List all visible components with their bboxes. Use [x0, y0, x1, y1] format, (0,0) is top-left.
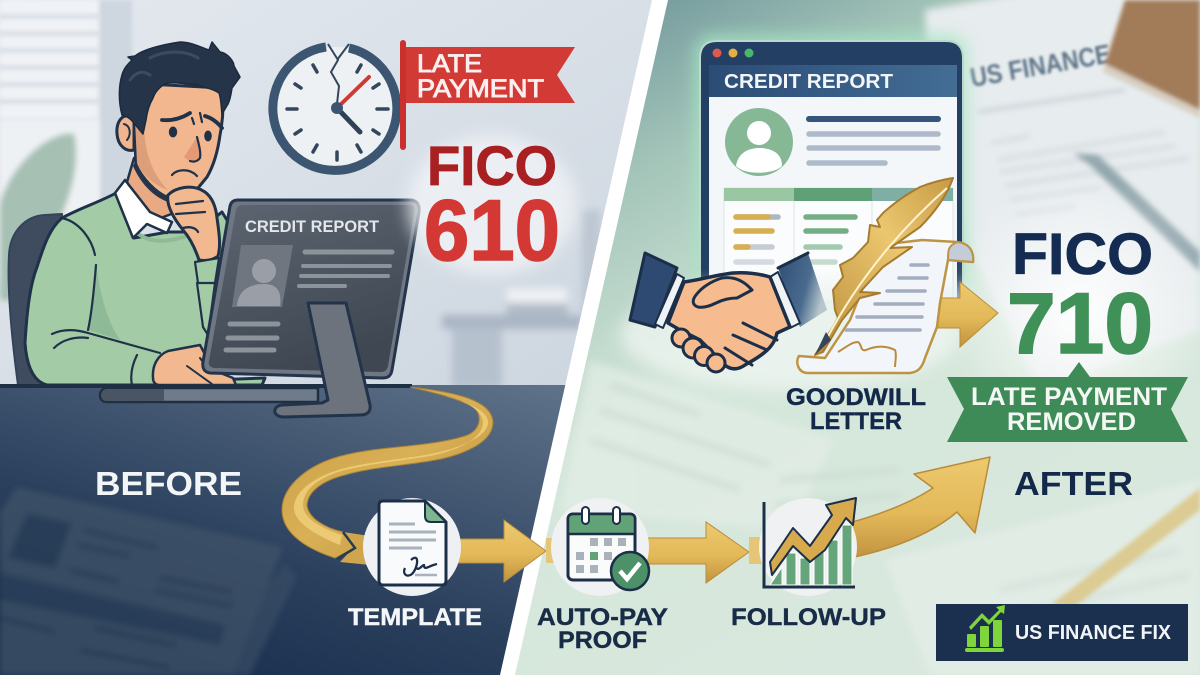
- document icon: [379, 501, 446, 585]
- score burst glow: [945, 175, 1200, 445]
- handshake: [630, 253, 827, 372]
- auto-pay label: [537, 604, 668, 654]
- typing finger lines: [187, 358, 212, 384]
- white shirt collar: [115, 180, 172, 238]
- clock face: [275, 47, 399, 171]
- chair: [9, 214, 62, 385]
- brand logo: us finance fix: [936, 604, 1188, 661]
- signature: [838, 342, 896, 367]
- blurred book: [1103, 0, 1200, 118]
- monitor: dim credit report: [203, 200, 419, 417]
- path stub into circle: [340, 532, 370, 565]
- label: before: BEFORE: [95, 465, 242, 502]
- blurred background desk: [442, 210, 600, 388]
- sweater shading: [88, 265, 120, 340]
- flag banner: [406, 47, 575, 103]
- right sleeve top edge: [778, 253, 808, 268]
- hair: [119, 42, 240, 134]
- straight gold arrow one: [440, 520, 546, 582]
- template label: TEMPLATE: [348, 604, 482, 631]
- heading: credit report: CREDIT REPORT: [245, 217, 380, 236]
- finger lines: [725, 323, 777, 365]
- report table: [724, 188, 953, 300]
- ear: [117, 116, 134, 150]
- thumb: [693, 278, 752, 307]
- connector band two: [749, 537, 779, 564]
- blurred paper text: US FINANCE: [968, 39, 1113, 93]
- credit report window: [700, 41, 963, 300]
- clock ring: [273, 47, 397, 170]
- blurred report paper: [925, 0, 1200, 390]
- red minute hand: [337, 77, 369, 108]
- goodwill letter scroll: [797, 178, 973, 373]
- growth bars: [770, 525, 852, 585]
- neckline band: [140, 235, 190, 241]
- fico label: FICO: [427, 134, 557, 197]
- scroll curl: [948, 242, 973, 262]
- credit report window glow: [695, 35, 967, 305]
- broken clock: [273, 44, 399, 171]
- left cuff: [655, 274, 684, 328]
- crack: [328, 44, 349, 104]
- face: [134, 84, 223, 198]
- check badge: [611, 552, 649, 590]
- clock hub: [331, 102, 343, 114]
- nose line, mouth and frown lines: [172, 113, 202, 176]
- follow-up circle: [759, 498, 857, 596]
- window frame: [700, 41, 963, 300]
- straight gold arrow two: [640, 522, 749, 583]
- monitor screen: [203, 200, 419, 378]
- dark desk surface: [0, 385, 566, 675]
- gold arrow to score: [937, 282, 998, 347]
- dark hour hand: [337, 108, 360, 132]
- photo placeholder: [232, 245, 293, 307]
- blurred paper lines: [978, 88, 1186, 200]
- keyboard: [100, 388, 318, 402]
- label: goodwill letter: [786, 384, 926, 435]
- late payment flag: PAYMENT: [417, 75, 544, 103]
- report body: [709, 97, 957, 300]
- step: auto-pay proof: [537, 498, 668, 654]
- after score: [1007, 222, 1153, 372]
- scroll body: [797, 240, 973, 373]
- step: follow-up: [731, 498, 886, 631]
- report heading: CREDIT REPORT: [724, 71, 893, 93]
- monitor stand: [275, 303, 370, 417]
- score 710: 710: [1007, 276, 1153, 372]
- path ribbon: [282, 387, 493, 558]
- step: template: [348, 498, 482, 631]
- letter text: LETTER: [810, 408, 902, 435]
- raised forearm cuff: [195, 258, 219, 335]
- label: after: AFTER: [1014, 465, 1133, 502]
- raised hand on chin: [168, 187, 220, 261]
- path tip chevron: [337, 532, 355, 559]
- feather spine: [825, 188, 947, 342]
- logo background: [936, 604, 1188, 661]
- calendar icon: [568, 507, 635, 580]
- dim text lines: [226, 252, 392, 350]
- goodwill text: GOODWILL: [786, 384, 926, 411]
- chart axes: [764, 502, 855, 587]
- auto-pay label: AUTO-PAY: [537, 604, 668, 631]
- right sleeve: [778, 253, 827, 327]
- panel: before background: [0, 0, 660, 675]
- blurred gold pen: [1052, 488, 1200, 610]
- window blinds: [0, 0, 132, 216]
- finger lines: [176, 201, 205, 232]
- shoulder and sleeve fold lines: [52, 218, 160, 385]
- left sleeve: [630, 253, 677, 327]
- report text lines: [809, 119, 938, 163]
- eyebrows: [162, 113, 222, 128]
- blurred pen: [1073, 153, 1200, 272]
- blurred lower papers: [560, 360, 1200, 675]
- follow-up label: FOLLOW-UP: [731, 604, 886, 631]
- window dots: [712, 48, 754, 58]
- face left shading: [135, 115, 168, 190]
- hour ticks: [287, 65, 388, 160]
- screen panel: [209, 205, 414, 372]
- ribbon shape: [947, 362, 1188, 442]
- big rising gold arrow: [845, 457, 990, 559]
- finger bumps: [672, 329, 725, 372]
- connector band: [546, 538, 554, 563]
- late payment flag: [400, 40, 575, 150]
- inner ear line: [124, 124, 130, 140]
- character: worried man at desk: [9, 42, 265, 385]
- gold trend arrow: [770, 498, 856, 575]
- logo icon: [965, 605, 1005, 652]
- report header bar: [709, 65, 957, 98]
- quill nib: [815, 332, 831, 355]
- path highlight: [294, 395, 488, 545]
- template circle: [363, 498, 461, 596]
- ribbon text: LATE PAYMENT: [971, 383, 1167, 411]
- panel: after background: [500, 0, 1200, 675]
- curved gold path: [282, 387, 493, 565]
- soft glow: [407, 135, 577, 275]
- late payment removed ribbon: [947, 362, 1188, 442]
- feather quill: [815, 178, 953, 355]
- nose shade: [184, 137, 200, 161]
- hair highlight: [130, 52, 198, 80]
- fico label: FICO: [1012, 222, 1153, 287]
- stubble shadow: [133, 162, 172, 202]
- avatar: [725, 108, 793, 176]
- fade under window: [690, 285, 974, 325]
- before score: [407, 134, 577, 279]
- neck: [127, 158, 192, 222]
- white diagonal divider: [500, 0, 668, 675]
- logo text: US FINANCE FIX: [1015, 622, 1172, 644]
- flag pole: [400, 40, 406, 150]
- clasped hands: [668, 273, 790, 369]
- letter lines: [846, 265, 928, 330]
- flag text: LATE: [417, 50, 482, 78]
- late payment removed ribbon: REMOVED: [1007, 408, 1136, 436]
- desk edge line: [0, 384, 412, 388]
- right cuff: [770, 272, 800, 328]
- score 610: 610: [424, 183, 560, 279]
- blurred paper on desk: [0, 487, 297, 675]
- eyes: [169, 126, 212, 142]
- white glow behind handshake and letter: [620, 280, 960, 390]
- typing hand: [153, 345, 236, 385]
- auto-pay circle: [551, 498, 649, 596]
- blurred plant: [0, 134, 76, 300]
- sweater: [25, 192, 265, 385]
- auto-pay label: PROOF: [558, 627, 647, 654]
